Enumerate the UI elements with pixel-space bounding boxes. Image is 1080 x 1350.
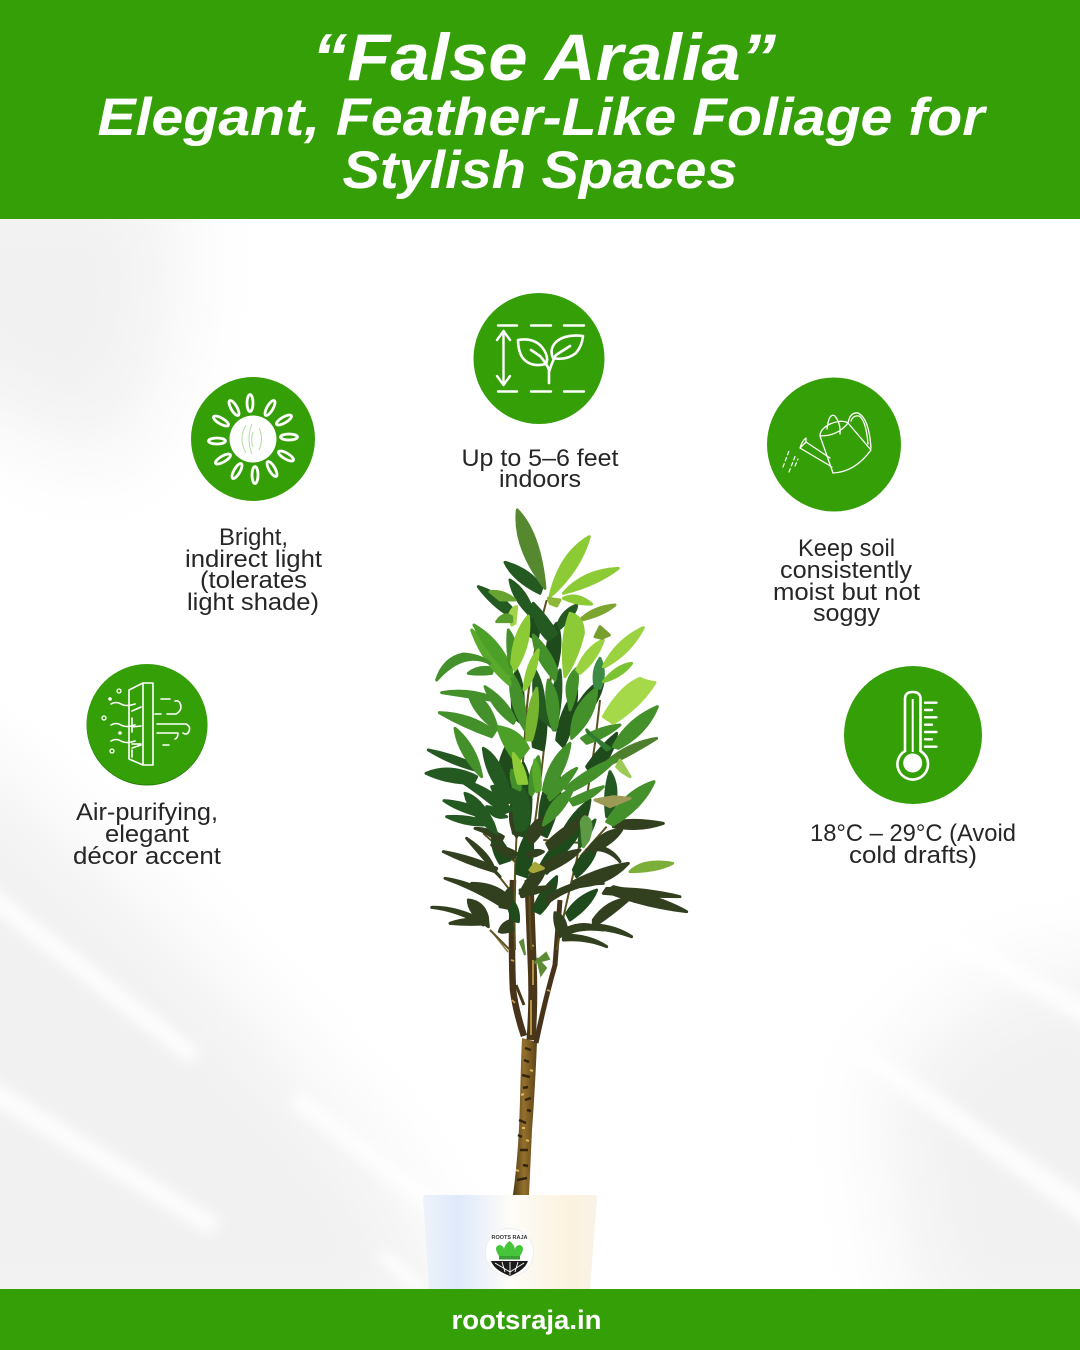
title: Elegant, Feather-Like Foliage for <box>98 88 988 147</box>
icon: watering can <box>767 378 901 512</box>
feature: water <box>767 378 920 627</box>
label: light: indirect light <box>185 546 322 573</box>
stems <box>483 600 627 950</box>
feature: height <box>462 293 619 493</box>
label: temperature: 18°C – 29°C (Avoid <box>810 820 1016 847</box>
pot <box>423 1195 597 1289</box>
label: air <box>73 799 221 870</box>
label: height: indoors <box>499 466 581 493</box>
foliage <box>426 510 687 950</box>
bright lime leaves <box>490 537 673 872</box>
footer website: rootsraja.in <box>452 1305 602 1335</box>
mid green leaves <box>437 510 657 847</box>
label: air: elegant <box>105 821 189 848</box>
label: water <box>773 535 920 627</box>
footer banner <box>0 1289 1080 1350</box>
icon: air purifier <box>86 664 208 786</box>
label: water: soggy <box>813 600 880 627</box>
label: water: consistently <box>780 557 912 584</box>
label: water: moist but not <box>773 579 920 606</box>
label: temperature <box>810 820 1016 869</box>
label: light: Bright, <box>219 524 288 551</box>
feature: light <box>185 377 322 616</box>
label: light: (tolerates <box>200 567 307 594</box>
deep green leaves <box>426 562 616 847</box>
dark lower leaves <box>432 793 687 947</box>
label: air: Air-purifying, <box>76 799 218 826</box>
label: height <box>462 445 619 493</box>
label: air: décor accent <box>73 843 221 870</box>
label: temperature: cold drafts) <box>849 842 977 869</box>
icon: thermometer <box>844 666 982 804</box>
plant: false aralia in white pot <box>423 510 687 1289</box>
label: height: Up to 5–6 feet <box>462 445 619 472</box>
title <box>98 20 988 200</box>
feature: air <box>73 664 221 870</box>
pot logo: Roots Raja sticker: ROOTS RAJA <box>491 1235 528 1241</box>
title: Stylish Spaces <box>342 141 738 200</box>
pot logo: Roots Raja sticker <box>486 1228 534 1276</box>
label: light: light shade) <box>187 589 319 616</box>
icon: plant height <box>474 293 604 424</box>
icon: sun <box>191 377 315 501</box>
trunk and branches <box>493 880 560 1195</box>
label: water: Keep soil <box>798 535 895 562</box>
feature: temperature <box>810 666 1016 869</box>
header banner <box>0 0 1080 219</box>
title: “False Aralia” <box>312 20 776 94</box>
label: light <box>185 524 322 616</box>
shadow mass of leaves <box>492 603 617 922</box>
